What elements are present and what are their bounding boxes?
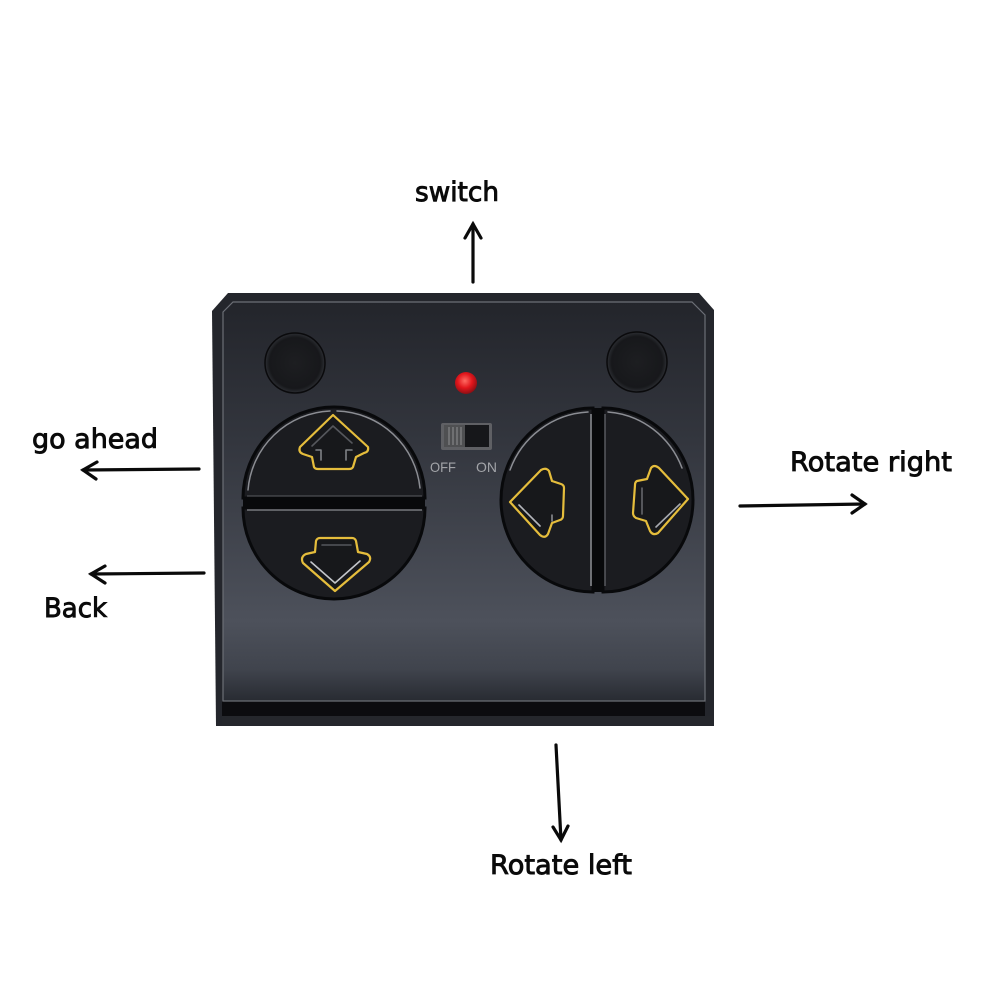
arrow: rotate right [740, 495, 865, 513]
label: switch: switch [415, 177, 499, 208]
label: rotate left: Rotate left [490, 850, 632, 881]
go ahead button [243, 407, 425, 498]
rotate left button [501, 408, 593, 592]
front face [223, 302, 705, 701]
red LED [455, 372, 477, 394]
arrow: back [91, 566, 204, 583]
ON label: ON [476, 459, 497, 475]
right round button [607, 332, 667, 392]
rotate right button [603, 408, 693, 592]
arrow: go ahead [83, 462, 199, 479]
arrow: switch [465, 224, 481, 282]
remote body [212, 293, 714, 726]
remote control [212, 293, 714, 726]
label: back: Back [44, 593, 107, 624]
slide switch [441, 423, 492, 450]
arrow: rotate left [553, 745, 568, 840]
label: go ahead: go ahead [32, 424, 158, 455]
OFF label: OFF [430, 459, 456, 475]
base ledge [222, 701, 713, 725]
back button [243, 508, 425, 599]
rotate left / right button pair [501, 408, 693, 592]
label: rotate right: Rotate right [790, 447, 952, 478]
go ahead / back button pair [243, 407, 425, 599]
left round button [265, 333, 325, 393]
